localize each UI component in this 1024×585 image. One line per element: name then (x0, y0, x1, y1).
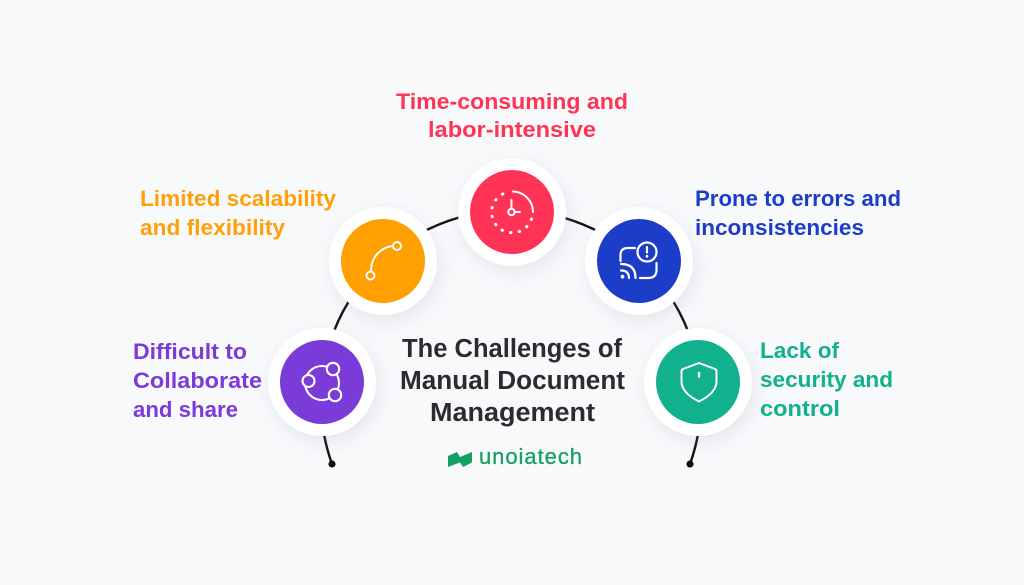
label: prone to errors: Prone to errors and (695, 186, 901, 211)
connecting arc (321, 210, 701, 468)
label: difficult to collaborate (133, 339, 262, 422)
title: Manual Document (400, 367, 626, 395)
label: difficult to collaborate: Collaborate (133, 368, 262, 393)
title: Management (430, 399, 596, 427)
label: prone to errors (695, 186, 901, 240)
label: prone to errors: inconsistencies (695, 215, 864, 240)
label: difficult to collaborate: and share (133, 397, 238, 422)
logo wordmark: unoiatech (479, 444, 582, 469)
label: difficult to collaborate: Difficult to (133, 339, 247, 364)
label: lack of security: security and (760, 367, 893, 392)
label: limited scalability (140, 186, 337, 240)
label: time-consuming: labor-intensive (428, 117, 596, 142)
icon: cast alert (620, 242, 656, 278)
title: The Challenges of (402, 335, 622, 363)
label: limited scalability: Limited scalability (140, 186, 337, 211)
node: limited scalability (329, 207, 437, 315)
icon: shield (681, 363, 717, 402)
label: lack of security: Lack of (760, 338, 840, 363)
label: time-consuming (396, 89, 628, 142)
icon: curve (366, 242, 401, 280)
label: time-consuming: Time-consuming and (396, 89, 628, 114)
logo: unoiatech (448, 444, 582, 469)
label: lack of security (760, 338, 893, 421)
icon: clock (492, 192, 533, 233)
node: difficult to collaborate (268, 328, 376, 436)
node: time-consuming (458, 158, 566, 266)
logo mark (448, 452, 472, 467)
label: lack of security: control (760, 396, 840, 421)
title (400, 335, 626, 427)
icon: share circle (302, 363, 341, 401)
node: prone to errors (585, 207, 693, 315)
label: limited scalability: and flexibility (140, 215, 286, 240)
node: lack of security (644, 328, 752, 436)
